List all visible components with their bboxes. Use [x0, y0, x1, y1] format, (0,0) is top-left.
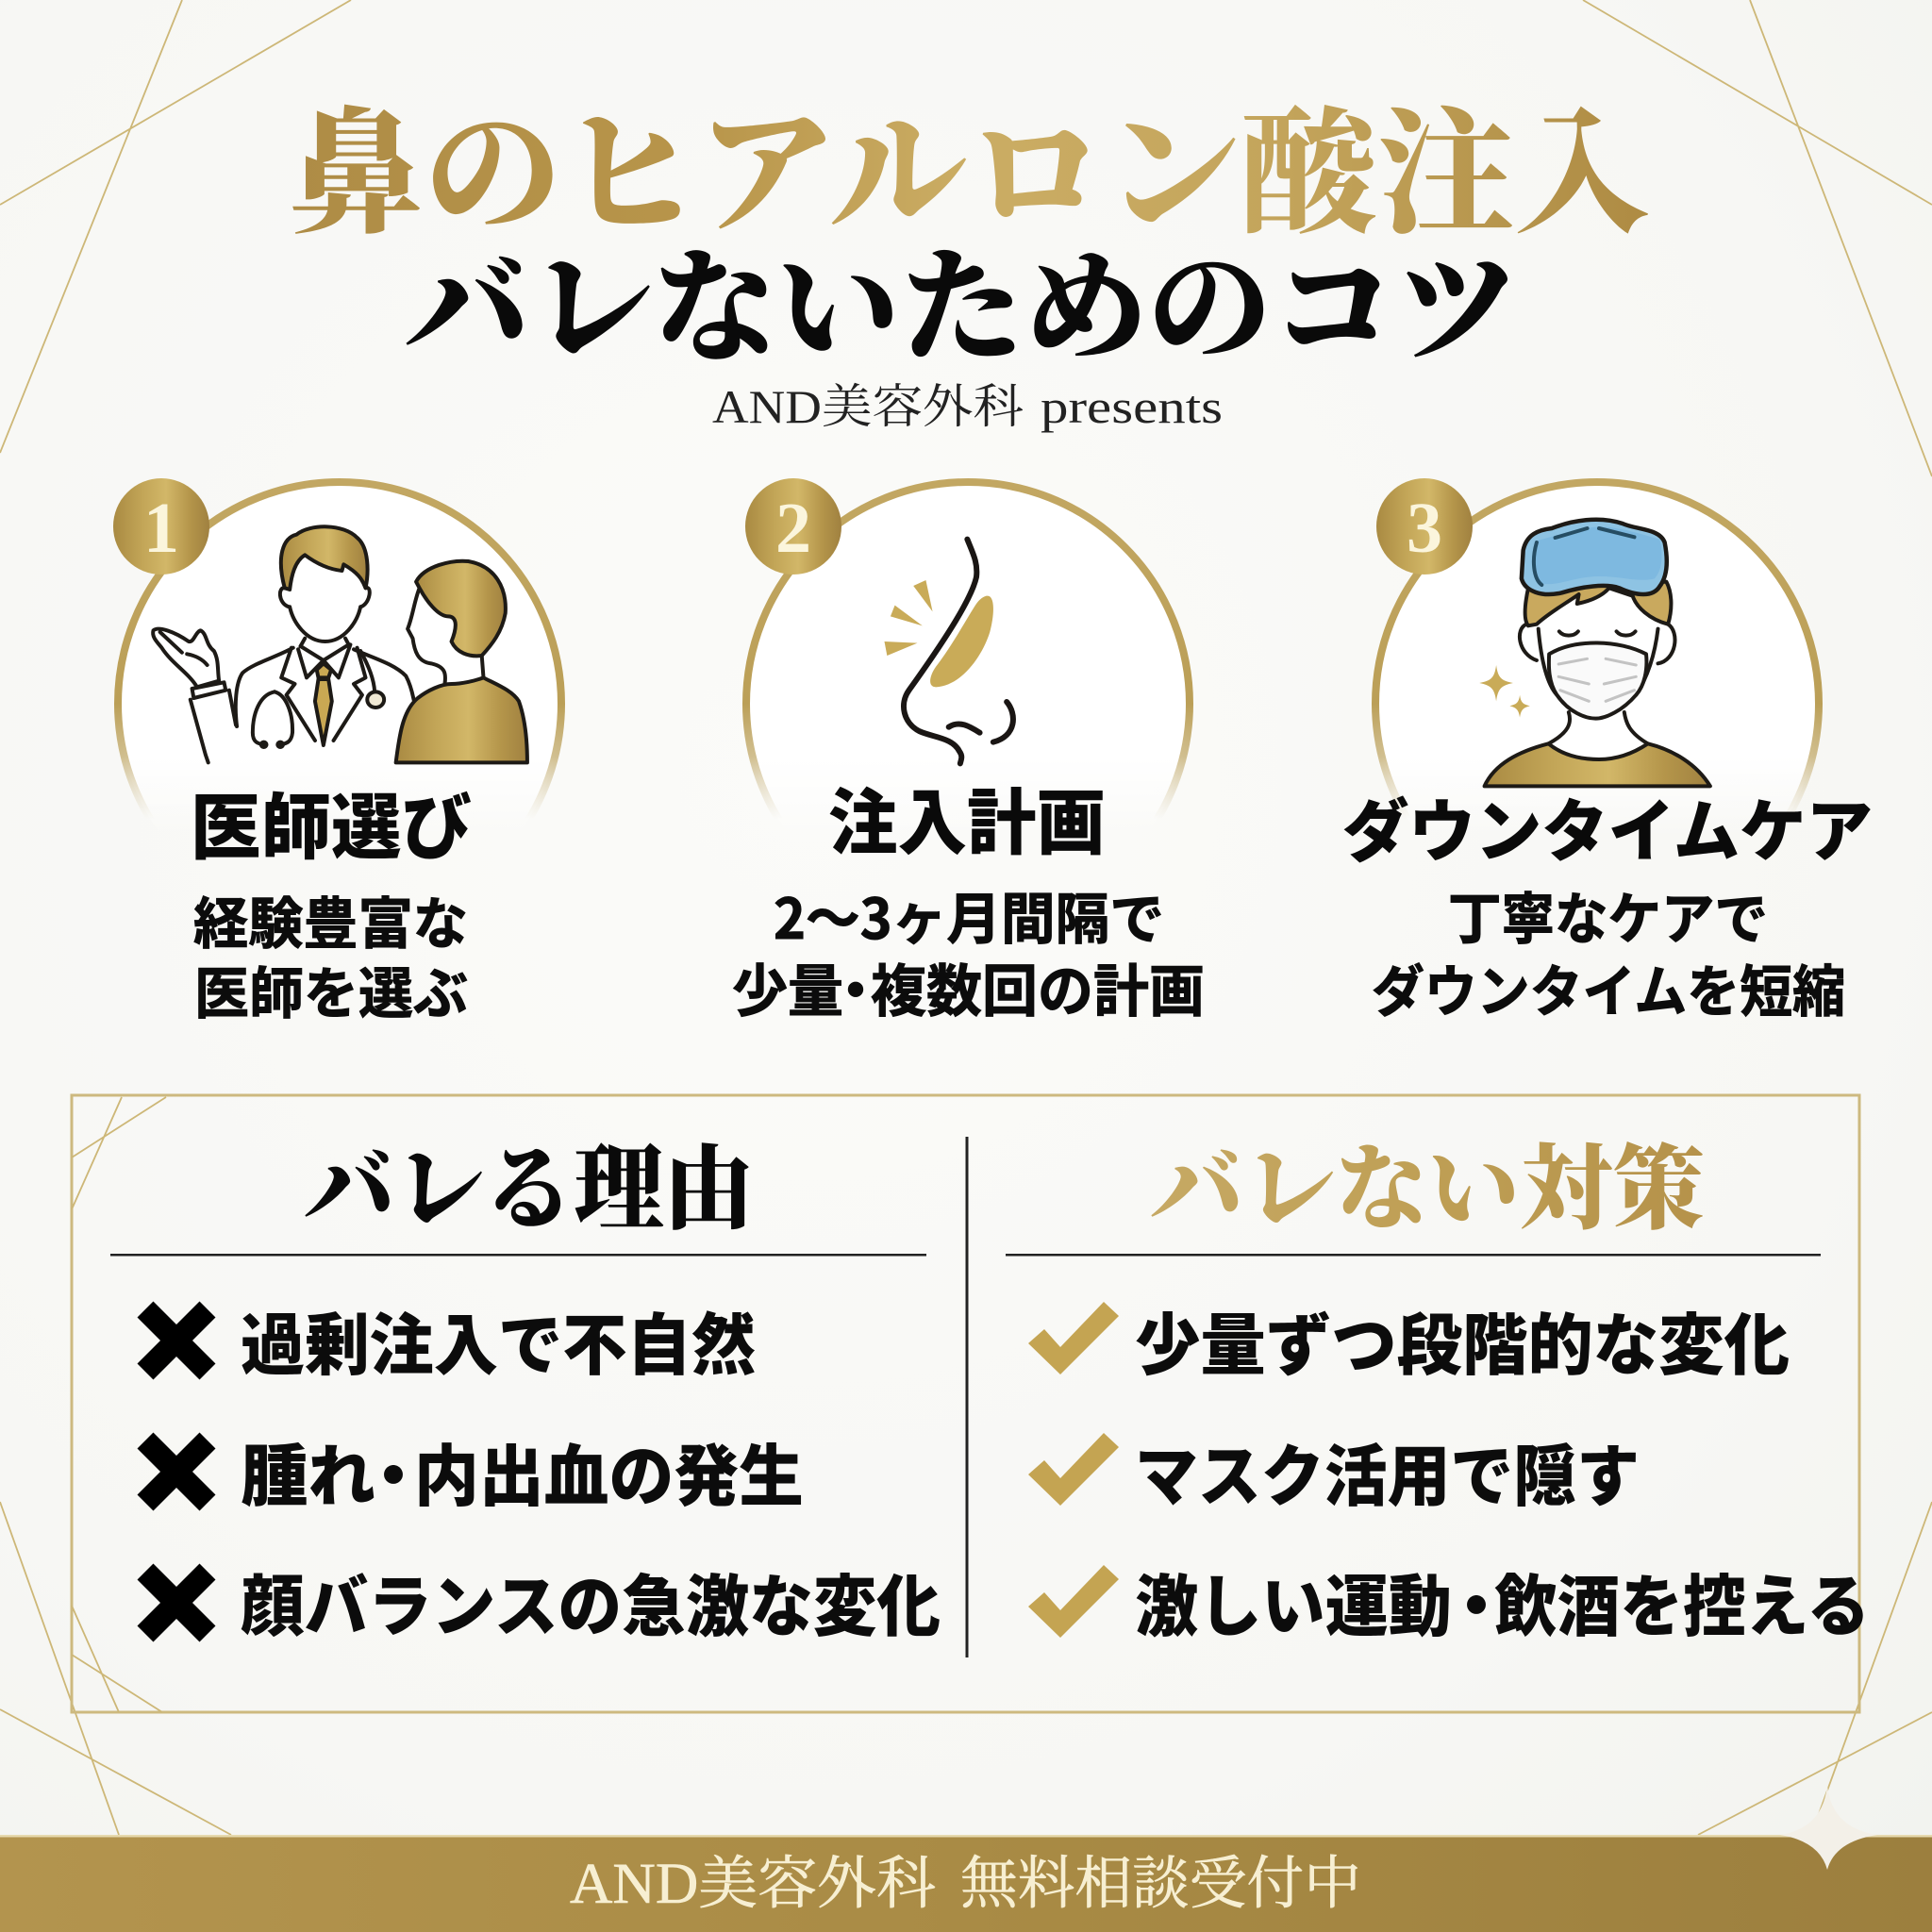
item 1: 過剰注入で不自然: [241, 1292, 756, 1389]
panel: step 2 injection plan: [732, 478, 1205, 1028]
panel: step 1 doctor selection: [113, 478, 561, 1029]
footer text: [570, 1853, 1361, 1916]
description 2: 複数回の計画: [871, 946, 1205, 1028]
item 1: 少量ずつ段階的な変化: [1135, 1292, 1790, 1389]
item 3: 顔バランスの急激な変化: [241, 1554, 941, 1650]
description 1: 経験豊富な: [193, 879, 468, 959]
heading: countermeasures: バレない対策: [1151, 1115, 1705, 1248]
heading: reasons: バレる理由: [305, 1115, 754, 1248]
badge 1: [113, 478, 209, 575]
description 2: 2〜3ヶ月間隔で: [774, 874, 1164, 955]
subtitle: [712, 380, 1223, 433]
panel: countermeasures column: [1006, 1115, 1870, 1650]
badge 3: 3: [1407, 489, 1442, 568]
badge 2: 2: [775, 489, 811, 568]
item 2: ・: [359, 1424, 427, 1520]
description 2: ・: [827, 946, 884, 1028]
item 3: [1028, 1554, 1870, 1650]
description 3: ダウンタイムを短縮: [1372, 947, 1845, 1027]
heading 3: ダウンタイムケア: [1342, 776, 1873, 875]
subtitle: presents: [1041, 380, 1223, 433]
description 3: 丁寧なケアで: [1448, 874, 1768, 955]
heading 2: 注入計画: [828, 765, 1106, 869]
description 1: 医師を選ぶ: [194, 949, 468, 1029]
description 3: [1372, 874, 1845, 1027]
icon: doctor and patient: [153, 526, 527, 762]
item 2: マスク活用で隠す: [1135, 1424, 1640, 1520]
item 2: 内出血の発生: [414, 1424, 804, 1520]
title: gold headline: 鼻のヒアルロン酸注入: [288, 65, 1651, 260]
description 2: 少量: [732, 946, 843, 1028]
badge 1: 1: [143, 489, 179, 568]
badge 2: [745, 478, 841, 575]
description 1: [193, 879, 468, 1029]
panel: comparison frame: [72, 1095, 1870, 1712]
title: black headline: バレないためのコツ: [406, 210, 1519, 387]
icon: nose with filler: [884, 540, 1013, 763]
icon: sparkle: [1780, 1786, 1877, 1870]
footer band: [0, 1835, 1932, 1932]
heading 1: 医師選び: [191, 770, 472, 874]
icon: masked person with cold pack: [1479, 520, 1710, 786]
ring 1: [118, 482, 561, 925]
item 3: 飲酒を控える: [1494, 1554, 1870, 1650]
badge 3: [1376, 478, 1473, 575]
item 3: 激しい運動: [1135, 1554, 1452, 1650]
description 2: [732, 874, 1205, 1028]
footer text: 無料相談受付中: [960, 1853, 1361, 1916]
ring 3: [1375, 482, 1819, 925]
item 3: ・: [1442, 1554, 1510, 1650]
item 2: 腫れ: [241, 1424, 375, 1520]
center divider: [966, 1137, 968, 1657]
item 2: [145, 1424, 804, 1520]
panel: reasons column: [110, 1115, 941, 1650]
ring 2: [746, 482, 1190, 925]
panel: step 3 downtime care: [1342, 478, 1873, 1027]
subtitle: AND美容外科: [712, 380, 1024, 433]
frame border: [72, 1095, 1859, 1712]
footer text: AND美容外科: [570, 1853, 936, 1916]
